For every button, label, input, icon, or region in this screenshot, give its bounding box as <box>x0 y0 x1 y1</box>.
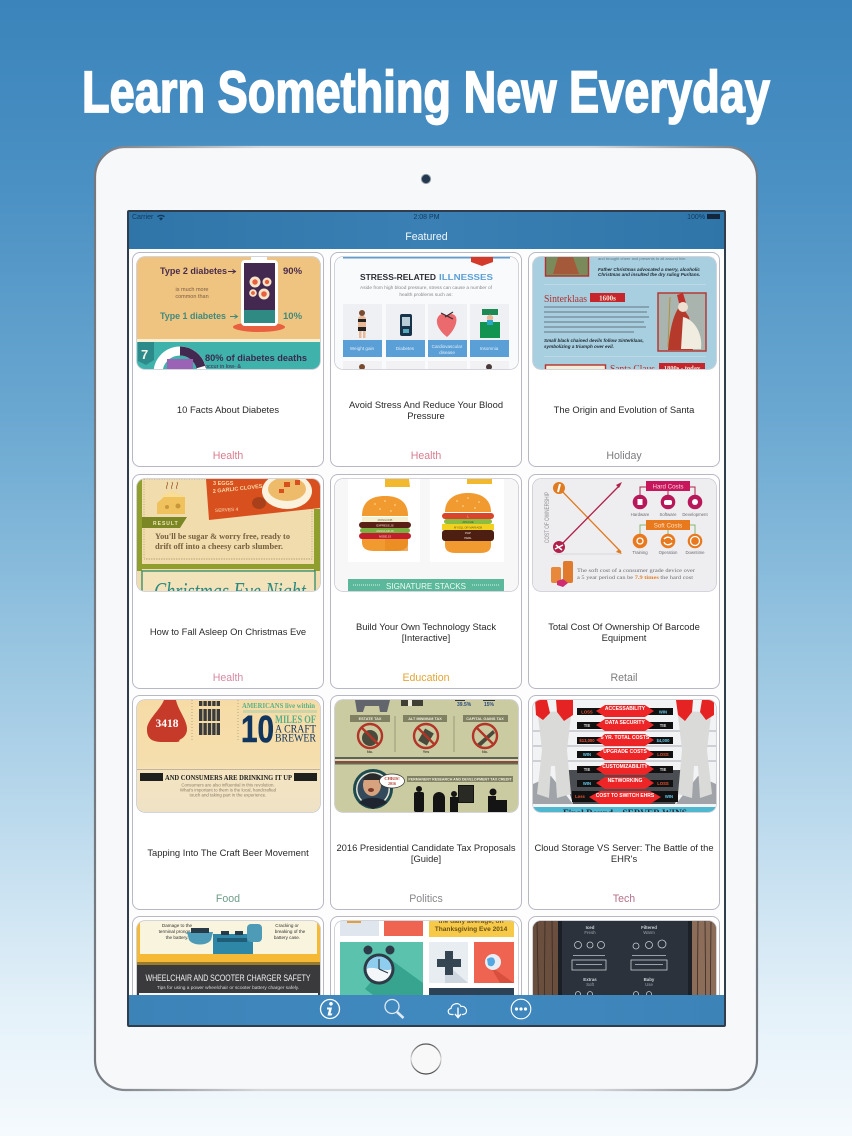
thumbnail: burgers: EXPRESS.JS <box>376 523 394 527</box>
thumbnail: thanksgiving: Thanksgiving Eve 2014 <box>435 926 508 933</box>
thumbnail: stress-related illnesses: Cardiovascular <box>432 344 463 349</box>
thumbnail: chalkboard: Baby <box>644 977 655 982</box>
card title: 2016 Presidential Candidate Tax Proposals [Guide] <box>336 842 516 864</box>
status bar carrier: Carrier <box>132 214 153 221</box>
card: wheelchair charger safety <box>132 916 324 1131</box>
thumbnail: tax proposals: 2016 <box>388 781 396 786</box>
thumbnail: santa: 1600s <box>599 294 616 302</box>
thumbnail: diabetes: is much more <box>175 287 209 293</box>
thumbnail: diabetes: 80% of diabetes deaths <box>205 353 307 364</box>
thumbnail: cloud vs server: LOSS <box>657 781 669 786</box>
thumbnail: cloud vs server: TIE <box>584 723 590 728</box>
thumbnail: cost of ownership: The soft cost of a consumer grade device over <box>577 567 695 574</box>
thumbnail: stress-related illnesses: ILLNESSES <box>439 272 493 282</box>
thumbnail: diabetes: 7 <box>141 347 148 362</box>
thumbnail: tax proposals: CAPITAL GAINS TAX <box>466 717 504 721</box>
category: Health <box>411 450 441 462</box>
thumbnail: burgers: ANGULAR.JS <box>376 528 394 532</box>
icon: wifi <box>157 214 165 220</box>
card: flat icons <box>330 916 522 1131</box>
tablet device frame <box>94 146 758 1092</box>
thumbnail: diabetes <box>137 257 320 369</box>
category: Holiday <box>606 450 642 462</box>
card: Cloud Storage <box>528 695 720 910</box>
thumbnail: craft beer: What's important to them is the local, handcrafted <box>180 787 277 792</box>
thumbnail: cloud vs server: ACCESSABILITY <box>605 706 646 712</box>
thumbnail: chalkboard: Iced <box>586 925 595 930</box>
thumbnail: chalkboard <box>533 921 716 1033</box>
thumbnail: cost of ownership: Soft Costs <box>654 522 682 529</box>
thumbnail: burgers: PHP <box>465 531 471 535</box>
thumbnail: cloud vs server: TIE <box>660 723 666 728</box>
card: Avoid Stress <box>330 252 522 467</box>
card: Tax Proposals <box>330 695 522 910</box>
thumbnail: craft beer: AMERICANS live within <box>242 703 315 710</box>
thumbnail: cloud vs server: COST TO SWITCH EHRS <box>596 793 655 799</box>
thumbnail: cloud vs server: LOSS <box>657 752 669 757</box>
thumbnail: wheelchair safety <box>137 921 320 1033</box>
thumbnail: craft beer: AND CONSUMERS ARE DRINKING IT UP <box>165 774 293 782</box>
card title: Tapping Into The Craft Beer Movement <box>147 847 309 858</box>
thumbnail: wheelchair safety: Tips for using a power wheelchair or scooter battery charger safely. <box>157 985 299 991</box>
category: Politics <box>409 892 443 904</box>
thumbnail: stress-related illnesses <box>335 257 518 369</box>
status bar battery <box>687 214 720 221</box>
thumbnail: cloud vs server: WIN <box>665 794 673 799</box>
thumbnail: cost of ownership: Training <box>632 550 648 555</box>
thumbnail: cost of ownership: Hardware <box>631 512 650 517</box>
thumbnail: cheesy carb: 3 EGGS <box>213 481 234 487</box>
thumbnail: craft beer: 10 <box>241 709 274 751</box>
thumbnail: tax proposals <box>335 700 518 812</box>
thumbnail: burgers: APACHE <box>462 520 474 524</box>
category: Retail <box>610 672 638 684</box>
camera <box>421 174 431 184</box>
thumbnail: craft beer: 3418 <box>156 718 179 730</box>
category: Health <box>213 450 243 462</box>
thumbnail: cloud vs server: WIN <box>583 781 591 786</box>
category: Food <box>216 892 240 904</box>
thumbnail: chalkboard: Filtered <box>641 925 657 930</box>
card: chalkboard <box>528 916 720 1131</box>
thumbnail: wheelchair safety: Cracking or <box>275 923 299 928</box>
thumbnail: burgers: MONGODB <box>378 518 393 522</box>
navigation bar <box>129 212 724 249</box>
thumbnail: santa: Father Christmas advocated a merry, alcoholic <box>598 267 700 272</box>
thumbnail: tax proposals: ESTATE TAX <box>359 717 382 721</box>
icon: info <box>320 998 340 1020</box>
thumbnail: stress-related illnesses: Insomnia <box>480 346 499 351</box>
thumbnail: tax proposals: No. <box>367 750 373 754</box>
thumbnail: burgers: SIGNATURE STACKS <box>386 582 467 591</box>
thumbnail: wheelchair safety: the battery. <box>166 935 188 940</box>
status bar battery: 100% <box>687 214 705 221</box>
thumbnail: cloud vs server: UPGRADE COSTS <box>603 749 647 755</box>
thumbnail: cloud vs server: CUSTOMIZABILITY <box>602 764 648 770</box>
thumbnail: thanksgiving <box>335 921 518 1033</box>
category: Tech <box>613 892 635 904</box>
thumbnail: stress-related illnesses: STRESS-RELATED <box>360 272 436 282</box>
thumbnail: tax proposals: PERMANENT RESEARCH AND DEVELOPMENT TAX CREDIT <box>408 777 512 781</box>
thumbnail: diabetes: 10% <box>283 311 303 322</box>
thumbnail: santa: Small black chained devils follow Sinterklaas, <box>544 338 644 343</box>
thumbnail: diabetes: Type 1 diabetes <box>160 311 226 321</box>
thumbnail: cost of ownership: a 5 year period can be 7.9 times the hard cost <box>577 575 694 581</box>
thumbnail: cloud vs server: WIN <box>583 752 591 757</box>
thumbnail: diabetes: 90% <box>283 266 303 277</box>
thumbnail: chalkboard: Warm <box>643 930 655 935</box>
thumbnail: cheesy carb: 2 GARLIC CLOVES <box>213 483 263 495</box>
card: Christmas Eve <box>132 474 324 689</box>
icon: search <box>384 998 404 1019</box>
thumbnail: santa <box>533 257 716 369</box>
card: Barcode Equipment <box>528 474 720 689</box>
thumbnail: cloud vs server: LOSS <box>581 709 593 714</box>
thumbnail: tax proposals: CHRIS! <box>384 776 400 781</box>
thumbnail: chalkboard: Fresh <box>584 930 596 935</box>
thumbnail: cloud vs server: $4,000 <box>657 738 670 743</box>
thumbnail: cost of ownership <box>533 479 716 591</box>
icon: more <box>510 998 532 1020</box>
thumbnail: tax proposals: No. <box>482 750 488 754</box>
card title: 10 Facts About Diabetes <box>177 404 279 415</box>
bottom toolbar <box>129 995 724 1025</box>
thumbnail: cost of ownership: Hard Costs <box>653 483 683 490</box>
thumbnail: stress-related illnesses: disease <box>439 350 455 355</box>
thumbnail: burgers: MYSQL OR MARIADB <box>454 525 482 529</box>
card title: Avoid Stress And Reduce Your Blood Pressure <box>349 399 503 421</box>
card title: Cloud Storage VS Server: The Battle of the EHR's <box>534 842 714 864</box>
thumbnail: cloud vs server <box>533 700 716 812</box>
thumbnail: cheesy carb: You'll be sugar & worry free, ready to <box>155 532 290 541</box>
thumbnail: santa: symbolizing a triumph over evil. <box>544 344 614 349</box>
thumbnail: cloud vs server: 5 YR. TOTAL COSTS <box>601 735 650 741</box>
thumbnail: burgers <box>335 479 518 591</box>
card title: How to Fall Asleep On Christmas Eve <box>150 626 306 637</box>
thumbnail: burgers: NODE.JS <box>379 534 391 538</box>
category: Education <box>402 672 450 684</box>
status bar time: 2:08 PM <box>413 214 440 221</box>
thumbnail: cloud vs server: Loss <box>575 794 586 799</box>
thumbnail: cheesy carb: drift off into a cheesy carb slumber. <box>155 542 283 551</box>
thumbnail: stress-related illnesses: Weight gain <box>350 346 375 351</box>
featured heading: Featured <box>405 231 448 243</box>
thumbnail: burgers: PERL <box>464 536 472 540</box>
card title: The Origin and Evolution of Santa <box>554 404 694 415</box>
card: 10 Facts About Diabetes <box>132 252 324 467</box>
card title: Total Cost Of Ownership Of Barcode Equipment <box>548 621 700 643</box>
thumbnail: cloud vs server: TIE <box>660 767 666 772</box>
thumbnail: stress-related illnesses: Aside from high blood pressure, stress can cause a number of <box>360 285 493 291</box>
thumbnail: cost of ownership: Development <box>682 512 708 517</box>
category: Health <box>213 672 243 684</box>
thumbnail: cheesy carb <box>137 479 320 591</box>
thumbnail: santa: Christmas and insulted the dry ruling Puritans. <box>598 272 700 277</box>
thumbnail: stress-related illnesses: Diabetes <box>396 346 415 351</box>
home button <box>411 1044 441 1074</box>
thumbnail: wheelchair safety: Damage to the <box>162 923 193 928</box>
thumbnail: chalkboard: Soft <box>586 982 595 987</box>
thumbnail: cost of ownership: Operation <box>659 550 678 555</box>
thumbnail: cost of ownership: Downtime <box>685 550 705 555</box>
thumbnail: chalkboard: Use <box>645 982 653 987</box>
thumbnail: cloud vs server: WIN <box>659 709 667 714</box>
thumbnail: wheelchair safety: terminal prongs of <box>159 929 196 934</box>
thumbnail: craft beer: Consumers are also influential in this revolution. <box>181 782 275 787</box>
thumbnail: tax proposals: 39.5% <box>457 702 472 708</box>
thumbnail: cloud vs server: DATA SECURITY <box>605 720 645 726</box>
thumbnail: cloud vs server: NETWORKING <box>608 778 642 784</box>
thumbnail: tax proposals: Yes <box>423 750 429 754</box>
thumbnail: burgers: L <box>467 514 469 518</box>
thumbnail: craft beer: touch and taking part in the experience. <box>190 792 266 797</box>
thumbnail: tax proposals: ALT MINIMUM TAX <box>408 717 442 721</box>
card: Santa <box>528 252 720 467</box>
thumbnail: tax proposals: 15% <box>484 702 495 708</box>
thumbnail: cheesy carb: RESULT <box>153 521 179 527</box>
thumbnail: chalkboard: Extras <box>583 977 597 982</box>
card title: Build Your Own Technology Stack [Interactive] <box>356 621 496 643</box>
thumbnail: diabetes: common than <box>175 294 209 300</box>
tablet screen <box>127 210 726 1027</box>
thumbnail: cheesy carb: SERVES 4 <box>215 506 239 514</box>
thumbnail: cloud vs server: $13,000 <box>579 738 595 743</box>
thumbnail: stress-related illnesses: health problems such as: <box>399 292 453 298</box>
thumbnail: wheelchair safety: battery case. <box>274 935 300 940</box>
thumbnail: cloud vs server: TIE <box>584 767 590 772</box>
card: Craft Beer <box>132 695 324 910</box>
thumbnail: wheelchair safety: breaking of the <box>275 929 306 934</box>
icon: cloud download <box>448 1003 468 1018</box>
thumbnail: craft beer <box>137 700 320 812</box>
card: Technology Stack <box>330 474 522 689</box>
thumbnail: santa: Sinterklaas <box>544 294 587 305</box>
thumbnail: cost of ownership: Software <box>660 512 677 517</box>
thumbnail: diabetes: Type 2 diabetes <box>160 266 227 276</box>
